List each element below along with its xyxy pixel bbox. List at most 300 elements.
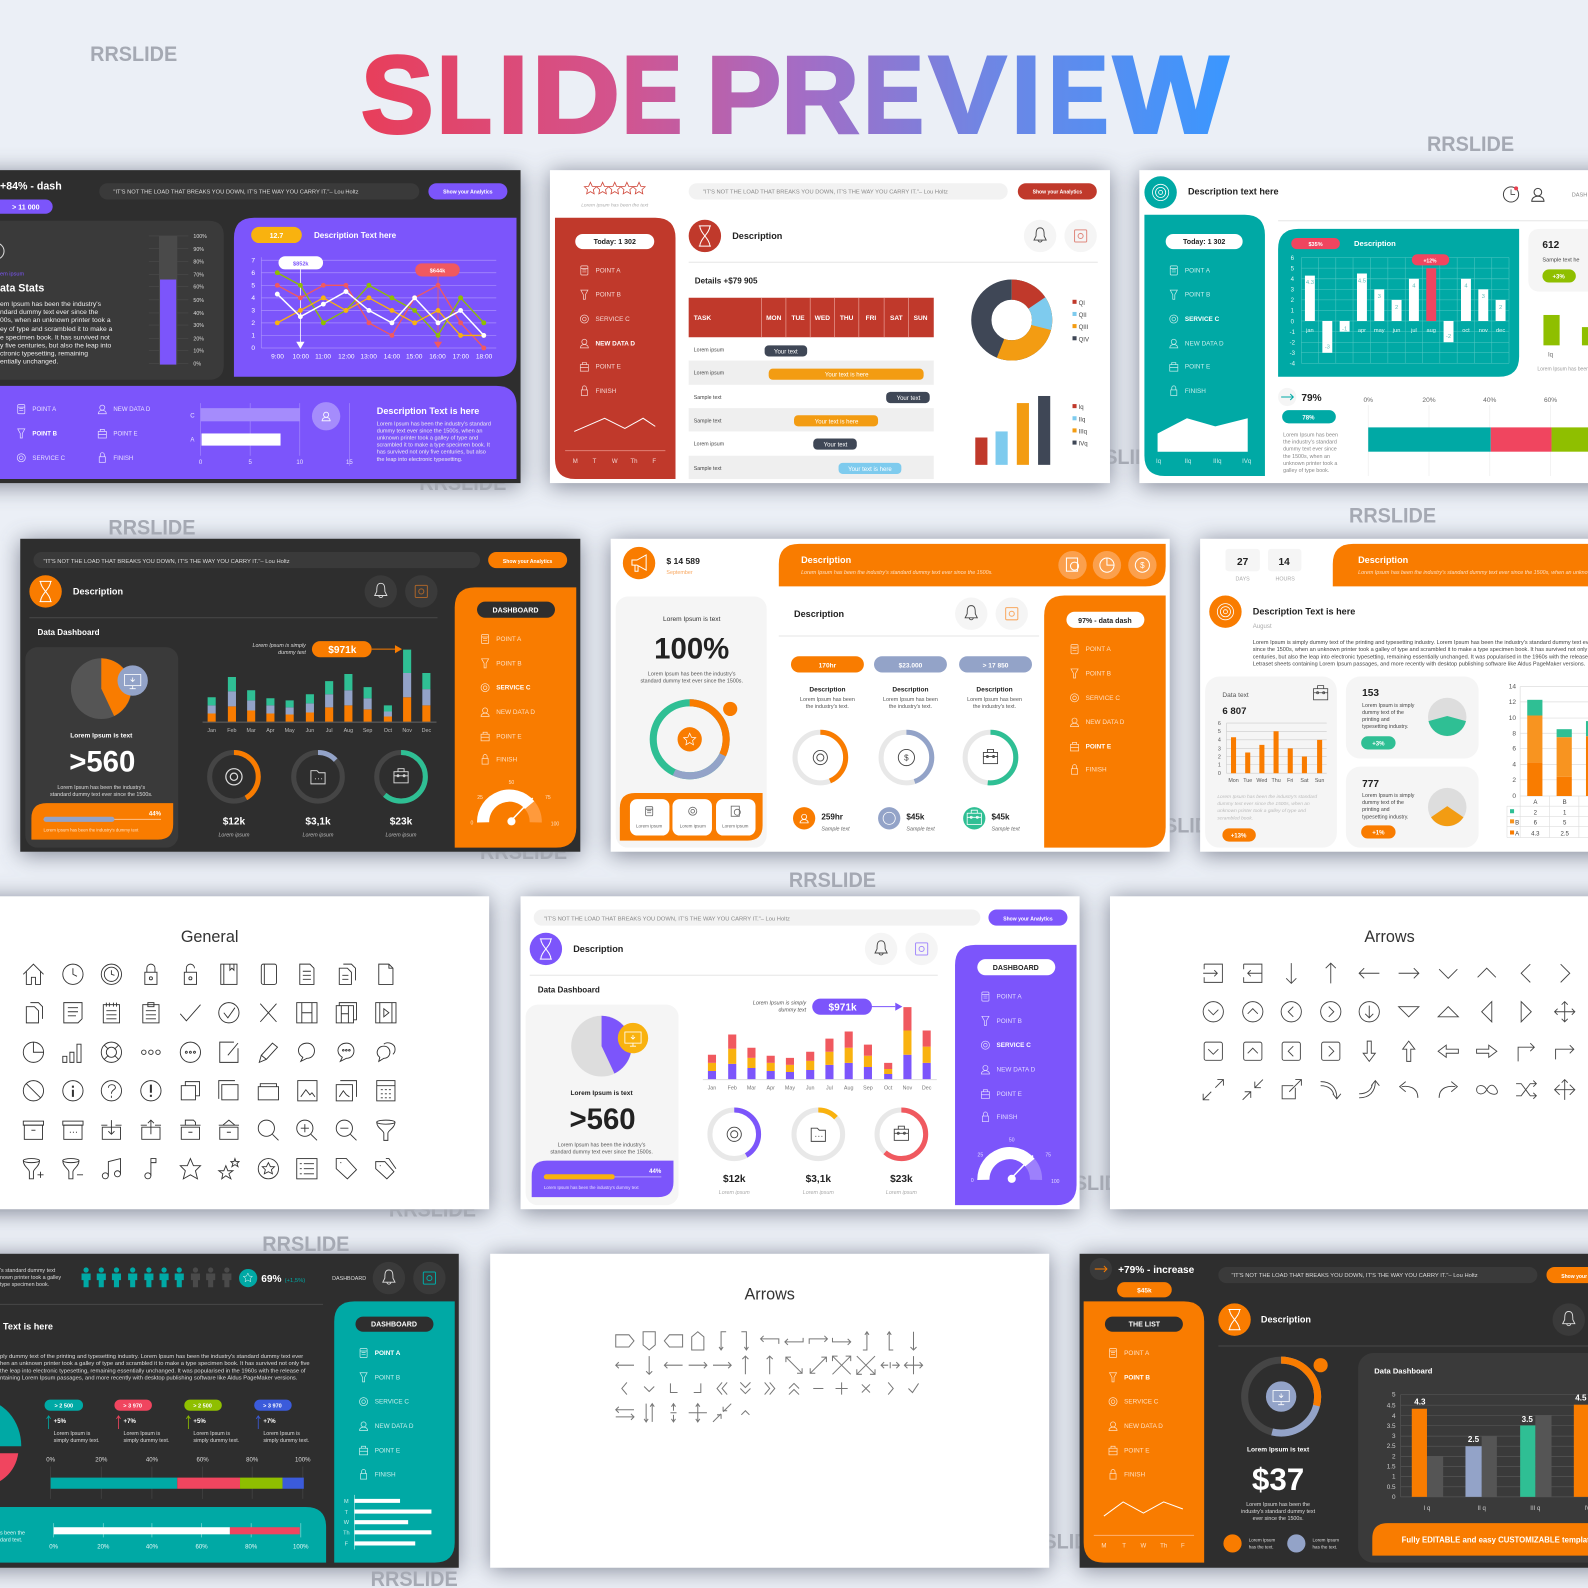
data text card: 0: [1218, 771, 1221, 777]
title: I: [1011, 35, 1041, 157]
analytics button: [1546, 1267, 1588, 1283]
three metric columns: Sample text: [991, 826, 1020, 832]
red sidebar: POINT B: [596, 292, 621, 299]
teal bar chart: $35%: [1308, 242, 1323, 248]
three metric columns: the industry's text.: [973, 704, 1016, 710]
description text: Lorem Ipsum is simply dummy text of the printing and typesetting industry. Lorem Ipsum has been the industry's standard dummy text ever: [1253, 640, 1588, 646]
ring kpi: ever since the 1500s.: [1253, 1516, 1304, 1522]
panel: purple light dashboard: [521, 896, 1080, 1209]
description header: Data Dashboard: [37, 628, 100, 637]
data text card: 6 807: [1222, 706, 1246, 717]
stacked bar chart: [703, 1007, 937, 1092]
analytics button: Show your Analytics: [1033, 189, 1082, 195]
orange sidebar: F: [1181, 1543, 1185, 1549]
gauge: 25: [978, 1153, 983, 1159]
percent column chart: 70%: [193, 272, 204, 278]
data text card: Tue: [1243, 778, 1252, 784]
arrow grid: [1203, 963, 1575, 1100]
panel: purple dark dashboard: [0, 170, 521, 483]
stacked column chart with table: 2: [1512, 777, 1516, 784]
data text card: 3: [1218, 746, 1221, 752]
teal bar chart: jan: [1305, 328, 1314, 334]
description row: [779, 598, 1039, 636]
red sidebar: NEW DATA D: [596, 340, 635, 347]
left kpi card: Lorem Ipsum has been the industry's: [57, 785, 145, 791]
ring charts: $12k: [723, 1174, 746, 1185]
stacked column chart with table: B: [1515, 820, 1519, 826]
teal sidebar: F: [345, 1541, 349, 1547]
grouped column chart: 3: [1392, 1433, 1396, 1440]
grouped column chart: 2.5: [1468, 1435, 1480, 1444]
card 777: Lorem Ipsum is simply: [1362, 793, 1415, 799]
grouped column chart: 4: [1392, 1413, 1396, 1420]
header: [1144, 176, 1588, 221]
donut legend: QIV: [1079, 337, 1090, 343]
stacked bar chart: Feb: [728, 1086, 737, 1092]
red sidebar: Today: 1 302: [594, 238, 636, 246]
percent column chart: 60%: [193, 285, 204, 291]
gantt table: SAT: [890, 315, 903, 322]
stacked column chart with table: 2.5: [1560, 832, 1570, 838]
ring kpi: Lorem Ipsum is text: [1247, 1446, 1310, 1453]
ring charts: [710, 1110, 926, 1196]
ring kpi: $37: [1252, 1462, 1304, 1497]
ring charts: Lorem ipsum: [303, 833, 334, 839]
kpi 79%: dummy text ever since: [1283, 447, 1337, 453]
teal sidebar: [334, 1301, 455, 1563]
orange sidebar: POINT A: [496, 636, 522, 643]
data text card: dummy text ever since the 1500s, when an: [1217, 801, 1310, 807]
orange sidebar: SERVICE C: [1086, 695, 1120, 702]
stacked bar chart: Nov: [903, 1086, 913, 1092]
gantt table: THU: [840, 315, 854, 322]
heading: General: [181, 928, 238, 946]
side kpi card: Lorem Ipsum has been: [1537, 367, 1588, 373]
stacked column chart with table: 14: [1509, 684, 1516, 691]
data text card: Lorem Ipsum has been the industry's standard: [1217, 794, 1317, 800]
callout $971k: $971k: [328, 645, 357, 656]
ring charts: $23k: [390, 816, 413, 827]
description: ntaining Lorem Ipsum passages, and more recently with desktop publishing software like Aldus PageMaker versions.: [0, 1375, 298, 1381]
red sidebar: T: [593, 459, 597, 465]
data text card: 2: [1218, 755, 1221, 761]
description row: Description: [794, 609, 844, 619]
left kpi card: 44%: [649, 1169, 662, 1175]
teal bar chart: Description: [1354, 239, 1396, 248]
grouped column chart: I q: [1424, 1506, 1430, 1512]
orange sidebar: W: [1141, 1543, 1147, 1549]
teal bar chart: 2: [1291, 298, 1295, 304]
teal sidebar: Th: [343, 1530, 350, 1536]
stacked column chart with table: 4: [1512, 762, 1516, 769]
data text card: Thu: [1271, 778, 1281, 784]
ring kpi: has the text.: [1249, 1545, 1274, 1550]
left kpi card: [25, 647, 178, 848]
data text card: 1: [1218, 763, 1221, 769]
title: I: [498, 35, 528, 157]
stacked percent bar: 100%: [295, 1457, 311, 1463]
red sidebar: POINT A: [596, 267, 621, 274]
data stats card: e specimen book. It has survived not: [0, 334, 110, 341]
quote bar: "IT'S NOT THE LOAD THAT BREAKS YOU DOWN, IT'S THE WAY YOU CARRY IT."– Lou Holtz: [703, 189, 948, 195]
data stats card: [0, 221, 224, 380]
red sidebar: [555, 218, 676, 479]
nav items: [17, 405, 151, 462]
ring kpi: industry's standard dummy text: [1241, 1509, 1316, 1515]
stacked bar chart: [203, 650, 436, 734]
top kpi: September: [666, 570, 693, 576]
orange sidebar: NEW DATA D: [1086, 719, 1125, 726]
ring kpi: Lorem Ipsum: [1313, 1537, 1339, 1542]
kpi header: $45k: [1137, 1287, 1152, 1294]
teal bar chart: jul: [1410, 328, 1417, 334]
ring kpi: Lorem Ipsum: [1249, 1537, 1275, 1542]
three metric columns: Sample text: [906, 826, 935, 832]
data dashboard card: Data Dashboard: [1374, 1366, 1433, 1375]
bar chart: 0: [199, 460, 203, 466]
column chart: IIq: [1079, 417, 1085, 423]
description text: Description Text is here: [1253, 607, 1355, 617]
watermarks: RRSLIDE: [480, 840, 567, 864]
bar chart: 10: [296, 460, 304, 466]
orange sidebar: FINISH: [1124, 1472, 1145, 1479]
data stats card: y five centuries, but also the leap into: [0, 342, 112, 349]
description text: [1209, 596, 1588, 667]
left kpi card: Lorem Ipsum is text: [570, 1090, 633, 1097]
analytics button: [988, 909, 1067, 926]
stacked bar chart: Jan: [207, 728, 216, 734]
left kpi card: 44%: [149, 811, 162, 817]
data dashboard card: [1358, 1353, 1588, 1563]
quote bar: [534, 909, 980, 926]
four metrics: > 3 970: [123, 1404, 142, 1410]
watermarks: RRSLIDE: [1135, 813, 1222, 837]
description: scrambled it to make a type specimen book. It: [377, 443, 490, 449]
grouped column chart: 5: [1392, 1392, 1396, 1399]
stacked bar chart: Jan: [708, 1086, 716, 1092]
three metric columns: 170hr: [819, 662, 837, 669]
data stats card: ey of type and scrambled it to make a: [0, 326, 113, 333]
title: D: [532, 35, 620, 157]
orange sidebar: POINT B: [1124, 1374, 1150, 1381]
red sidebar: M: [573, 459, 578, 465]
teal footer chart: [0, 1507, 326, 1563]
panel: orange data report: [1200, 539, 1588, 852]
intro text: type specimen book.: [0, 1282, 49, 1288]
teal sidebar: POINT B: [1185, 292, 1210, 299]
four metrics: Lorem Ipsum is: [54, 1431, 91, 1437]
purple line chart panel: 5: [251, 283, 255, 290]
description: Text is here: [3, 1322, 53, 1332]
grouped column chart: III q: [1530, 1506, 1540, 1512]
purple sidebar: FINISH: [997, 1114, 1018, 1121]
three metric columns: Lorem Ipsum has been: [967, 697, 1022, 703]
description header: Data Dashboard: [538, 986, 600, 995]
stacked percent bar: 40%: [146, 1457, 159, 1463]
description: ply dummy text of the printing and typesetting industry. Lorem Ipsum has been the industry's standard dummy text ever: [0, 1354, 303, 1360]
teal bar chart: 2: [1499, 305, 1502, 311]
data stats card: em Ipsum has been the industry's: [0, 301, 102, 308]
watermarks: RRSLIDE: [789, 868, 876, 892]
kpi header: > 11 000: [12, 204, 40, 212]
teal footer chart: 40%: [146, 1545, 159, 1551]
gauge: 50: [509, 780, 514, 786]
description: [0, 1322, 310, 1381]
data stats card: ata Stats: [0, 283, 44, 295]
grouped column chart: 1.5: [1387, 1463, 1396, 1470]
ring charts: $23k: [890, 1174, 913, 1185]
teal bar chart: -1: [1342, 327, 1347, 333]
teal bar chart: -4: [1290, 362, 1296, 368]
donut legend: [1073, 300, 1090, 343]
data text card: Mon: [1228, 778, 1239, 784]
panel: orange dark chart dashboard: [1080, 1254, 1588, 1568]
data text card: 5: [1218, 729, 1221, 735]
purple line chart panel: 12:00: [338, 354, 355, 361]
description header: [530, 933, 938, 995]
quote bar: "IT'S NOT THE LOAD THAT BREAKS YOU DOWN, IT'S THE WAY YOU CARRY IT."– Lou Holtz: [544, 917, 790, 923]
gantt table: Your text is here: [848, 467, 892, 473]
teal bar chart: dec: [1496, 328, 1505, 334]
orange sidebar: DASHBOARD: [492, 607, 539, 615]
panel: red gantt dashboard: [550, 170, 1110, 483]
left card 100%: Lorem ipsum: [680, 823, 706, 828]
title: E: [622, 35, 682, 157]
stacked bar chart: May: [785, 1086, 795, 1092]
card 153: printing and: [1362, 717, 1390, 723]
title: E: [1048, 35, 1108, 157]
panel: teal dark dashboard: [0, 1254, 459, 1568]
description header: [29, 575, 438, 637]
kpi 69%: [239, 1269, 305, 1287]
teal bar chart: apr: [1358, 328, 1366, 334]
gantt table: MON: [766, 315, 782, 322]
data text card: Wed: [1256, 778, 1267, 784]
grouped column chart: 3.5: [1387, 1423, 1396, 1430]
teal sidebar: NEW DATA D: [1185, 340, 1224, 347]
four metrics: +5%: [193, 1419, 206, 1425]
stacked bar chart: Nov: [402, 728, 412, 734]
left card 100%: Lorem ipsum: [722, 823, 749, 828]
kpi 79%: galley of type book.: [1283, 468, 1329, 474]
ring charts: Lorem ipsum: [886, 1190, 917, 1196]
stacked column chart with table: 10: [1509, 715, 1516, 722]
title: E: [863, 35, 924, 157]
orange sidebar: 97% - data dash: [1078, 617, 1132, 625]
ring charts: Lorem ipsum: [719, 1190, 750, 1196]
callout $971k: $971k: [829, 1003, 857, 1014]
percent column chart: 40%: [193, 311, 204, 317]
stacked percent bar: 0%: [46, 1457, 56, 1463]
nav items: POINT A: [32, 407, 57, 413]
quote bar: "IT'S NOT THE LOAD THAT BREAKS YOU DOWN, IT'S THE WAY YOU CARRY IT."– Lou Holtz: [1232, 1273, 1478, 1279]
ring charts: $3,1k: [806, 1174, 831, 1185]
teal sidebar: POINT E: [1185, 364, 1210, 371]
four metrics: simply dummy text.: [54, 1438, 100, 1444]
three metric columns: $: [904, 754, 909, 763]
purple line chart panel: 6: [251, 270, 255, 277]
teal sidebar: POINT E: [375, 1447, 400, 1454]
analytics button: [488, 552, 567, 568]
watermarks: RRSLIDE: [1015, 1530, 1102, 1554]
purple line chart panel: $852k: [293, 261, 309, 267]
description text: August: [1253, 624, 1272, 630]
three metric columns: Lorem Ipsum has been: [800, 697, 855, 703]
gauge: 75: [545, 795, 551, 801]
stacked column chart with table: 2: [1534, 810, 1538, 816]
card 153: [1346, 677, 1479, 759]
analytics button: Show your Analytics: [503, 559, 553, 565]
red sidebar: POINT E: [596, 364, 621, 371]
stacked bar chart: Jun: [306, 728, 314, 734]
side kpi card: Iq: [1548, 352, 1553, 358]
countdown: 14: [1279, 557, 1290, 568]
gantt table: Lorem ipsum: [694, 347, 725, 353]
orange sidebar: NEW DATA D: [496, 709, 535, 716]
orange sidebar: POINT B: [1086, 671, 1111, 678]
orange sidebar: NEW DATA D: [1124, 1423, 1163, 1430]
stacked column chart with table: [1507, 684, 1588, 838]
teal bar chart: aug: [1427, 328, 1436, 334]
data text card: [1205, 677, 1337, 848]
kpi header: +79% - increase: [1118, 1265, 1195, 1276]
watermarks: RRSLIDE: [262, 1232, 349, 1256]
data text card: Sun: [1315, 778, 1324, 784]
kpi header: +84% - dash: [0, 180, 62, 192]
kpi 79%: unknown printer took a: [1283, 461, 1337, 467]
gauge: 0: [971, 1178, 974, 1184]
gantt table: Sample text: [694, 395, 722, 401]
stacked bar chart: Mar: [747, 1086, 756, 1092]
ring kpi: [1223, 1358, 1339, 1553]
quote bar: [99, 183, 419, 200]
left card 100%: [616, 597, 767, 848]
percent column chart: 20%: [193, 336, 204, 342]
teal bar chart: 2: [1395, 305, 1398, 311]
purple line chart panel: 15:00: [406, 354, 423, 361]
teal sidebar: W: [344, 1520, 350, 1526]
description: dummy text ever since the 1500s, when an: [377, 428, 482, 434]
stacked percent bar: 60%: [1544, 397, 1557, 404]
teal bar chart: 6: [1291, 256, 1295, 262]
column chart: Iq: [1079, 405, 1084, 411]
orange sidebar: POINT A: [1086, 646, 1111, 653]
gantt table: TUE: [791, 315, 805, 322]
stacked column chart with table: 1: [1563, 810, 1567, 816]
header: Description text here: [1188, 186, 1279, 196]
description: Description Text is here: [377, 406, 479, 416]
purple line chart panel: [234, 218, 517, 377]
teal footer chart: dard text.: [0, 1537, 22, 1543]
stacked bar chart: Aug: [344, 728, 353, 734]
purple line chart panel: 14:00: [384, 354, 401, 361]
teal bar chart: 0: [1291, 319, 1295, 325]
title: S: [361, 35, 434, 157]
teal bar chart: -3: [1325, 344, 1330, 350]
column chart: IVq: [1079, 442, 1088, 448]
gantt table: Your text is here: [815, 419, 859, 425]
kpi 79%: 79%: [1301, 393, 1322, 404]
percent column chart: 10%: [193, 348, 204, 354]
teal footer chart: 60%: [195, 1545, 208, 1551]
stacked column chart with table: 8: [1512, 730, 1516, 737]
teal footer chart: s been the: [0, 1530, 25, 1536]
kpi 79%: the industry's standard: [1283, 440, 1337, 446]
card 153: dummy text of the: [1362, 710, 1404, 716]
panel: orange light dashboard: [611, 539, 1170, 852]
description header: [1218, 1303, 1588, 1346]
four metrics: > 2 500: [54, 1404, 73, 1410]
orange header: Description: [1358, 555, 1408, 565]
gantt table: Your text: [824, 443, 848, 449]
description header: Description: [73, 586, 123, 596]
people pictogram: [82, 1267, 231, 1287]
description: Lorem Ipsum has been the industry's standard: [377, 421, 491, 427]
three metric columns: Lorem Ipsum has been: [883, 697, 938, 703]
star rating: Lorem Ipsum has been the text: [581, 203, 649, 209]
column chart: IIIq: [1079, 429, 1087, 435]
description header: Details +$79 905: [695, 277, 758, 286]
grouped column chart: 0: [1392, 1494, 1396, 1501]
purple line chart panel: 13:00: [360, 354, 377, 361]
teal bar chart: may: [1374, 328, 1385, 334]
purple sidebar: [955, 945, 1077, 1205]
three metric columns: $45k: [906, 812, 925, 821]
left kpi card: >560: [570, 1103, 636, 1136]
callout $971k: [253, 641, 402, 657]
stacked column chart with table: A: [1533, 800, 1538, 806]
left card 100%: Lorem Ipsum has been the industry's: [648, 672, 736, 678]
teal sidebar: SERVICE C: [375, 1399, 409, 1406]
teal footer chart: 0%: [49, 1545, 59, 1551]
four metrics: Lorem Ipsum is: [263, 1431, 300, 1437]
teal sidebar: FINISH: [1185, 388, 1206, 395]
percent column chart: 30%: [193, 323, 204, 329]
left card 100%: Lorem ipsum: [636, 823, 663, 828]
grouped column chart: [1387, 1392, 1588, 1512]
analytics button: [428, 183, 507, 200]
green series: [275, 270, 486, 338]
stacked bar chart: Oct: [884, 1086, 893, 1092]
teal bar chart: +12%: [1423, 258, 1437, 264]
three metric columns: Description: [809, 687, 846, 694]
description text: centuries, but also the leap into electronic typesetting, remaining essentially unchanged. It was popularised in the 1960s with the release of: [1253, 654, 1588, 660]
purple line chart panel: 11:00: [315, 354, 331, 361]
teal bar chart: 3: [1291, 288, 1295, 294]
white series: [275, 289, 486, 338]
four metrics: > 2 500: [193, 1404, 212, 1410]
orange sidebar: [1044, 596, 1166, 848]
heading: Arrows: [1364, 928, 1415, 946]
teal sidebar: Today: 1 302: [1183, 238, 1225, 246]
countdown: DAYS: [1236, 576, 1250, 582]
teal bar chart: 4.3: [1306, 280, 1314, 286]
stacked column chart with table: 5: [1563, 820, 1567, 826]
stacked column chart with table: 6: [1534, 820, 1538, 826]
three metric columns: Description: [976, 687, 1013, 694]
teal footer chart: 80%: [245, 1545, 258, 1551]
stacked percent bar: 60%: [196, 1457, 209, 1463]
grouped column chart: II q: [1477, 1506, 1486, 1512]
teal sidebar: NEW DATA D: [375, 1423, 414, 1430]
gantt table: WED: [815, 315, 830, 322]
quote bar: [1218, 1267, 1537, 1283]
purple sidebar: NEW DATA D: [997, 1066, 1036, 1073]
watermarks: RRSLIDE: [1427, 132, 1514, 156]
stacked bar chart: Jul: [326, 728, 333, 734]
teal sidebar: POINT A: [1185, 267, 1211, 274]
orange sidebar: POINT E: [1086, 743, 1111, 750]
